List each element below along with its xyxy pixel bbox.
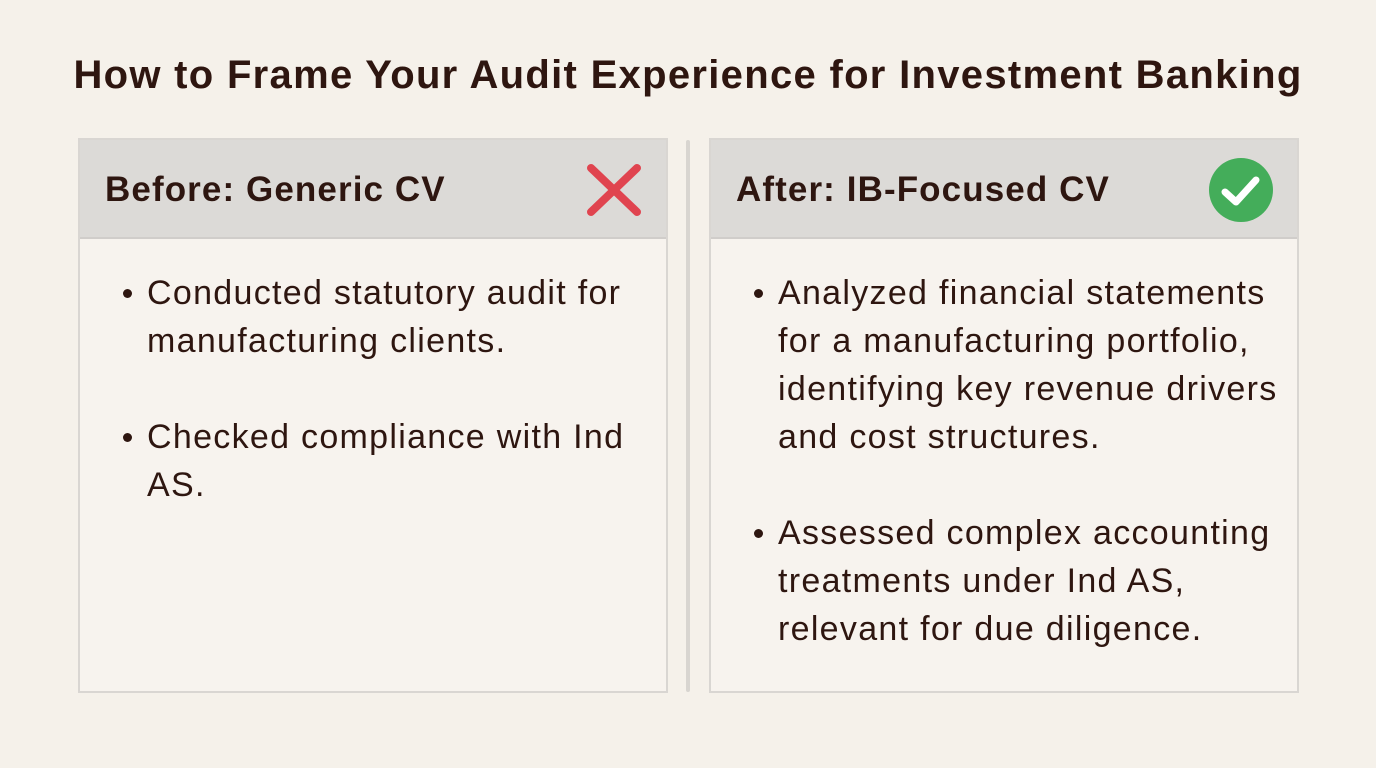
bullet 1: manufacturing clients. bbox=[147, 322, 506, 360]
header: before bbox=[80, 140, 666, 239]
bullet 1: for a manufacturing portfolio, bbox=[778, 322, 1250, 360]
bullet 2: treatments under Ind AS, bbox=[778, 562, 1185, 600]
icon: red cross bbox=[587, 164, 641, 216]
header: before: Before: Generic CV bbox=[105, 170, 446, 209]
bullet 1: and cost structures. bbox=[778, 418, 1101, 456]
bullet 1: Analyzed financial statements bbox=[778, 274, 1266, 312]
divider bbox=[686, 140, 690, 692]
panel: after bbox=[709, 138, 1299, 693]
bullet 1 bbox=[778, 269, 1278, 461]
icon: green check bbox=[1209, 158, 1273, 222]
bullet 2: Checked compliance with Ind bbox=[147, 418, 624, 456]
bullet 2 bbox=[778, 509, 1270, 653]
bullet 2: AS. bbox=[147, 466, 206, 504]
header: after bbox=[711, 140, 1297, 239]
bullet 1: identifying key revenue drivers bbox=[778, 370, 1278, 408]
bullet 1 bbox=[147, 269, 621, 365]
panel: before bbox=[78, 138, 668, 693]
bullet 1: Conducted statutory audit for bbox=[147, 274, 621, 312]
bullet 2: Assessed complex accounting bbox=[778, 514, 1270, 552]
title: How to Frame Your Audit Experience for Investment Banking bbox=[73, 53, 1303, 97]
bullet 2 bbox=[147, 413, 624, 509]
bullet 2: relevant for due diligence. bbox=[778, 610, 1202, 648]
header: after: After: IB-Focused CV bbox=[736, 170, 1110, 209]
